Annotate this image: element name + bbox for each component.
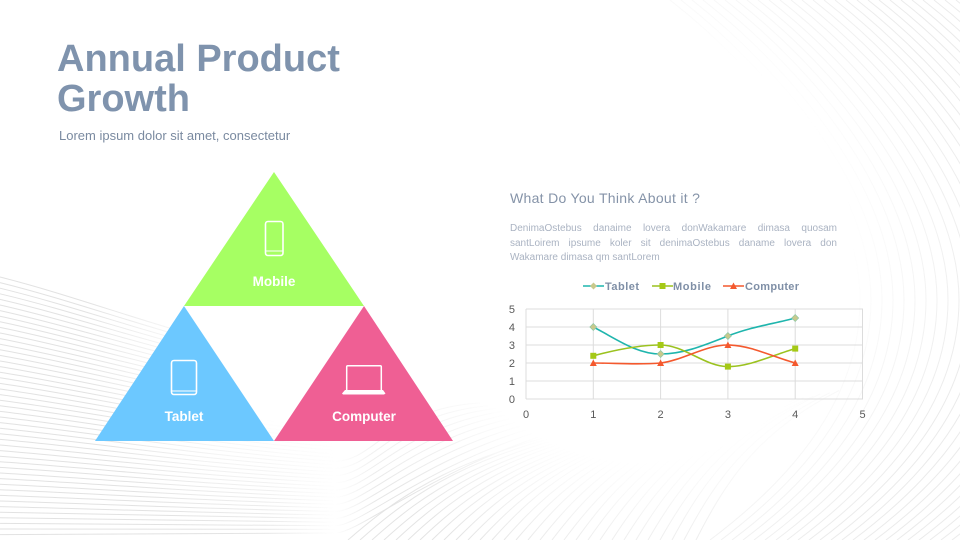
paragraph xyxy=(510,223,837,263)
label: Tablet: Tablet xyxy=(165,409,203,424)
label: Computer: Computer xyxy=(332,409,396,424)
series: Mobile xyxy=(590,342,798,370)
chart axis labels: 3 xyxy=(509,340,515,352)
triangle: Computer xyxy=(274,306,453,441)
chart axis labels: 4 xyxy=(509,322,515,334)
icon: tablet xyxy=(172,360,196,394)
chart legend xyxy=(583,281,800,293)
series: Computer xyxy=(590,342,799,366)
title: Annual Product xyxy=(57,38,340,80)
chart axis labels: 2 xyxy=(509,358,515,370)
triangle: Mobile xyxy=(184,172,364,306)
chart axis labels: 3 xyxy=(725,409,731,421)
chart axis labels: 1 xyxy=(509,376,515,388)
chart legend: Computer xyxy=(745,281,800,293)
title xyxy=(57,38,340,120)
chart axis labels: 4 xyxy=(792,409,798,421)
chart axis labels: 0 xyxy=(523,409,529,421)
chart axis labels: 0 xyxy=(509,394,515,406)
heading: What Do You Think About it: What Do You Think About it ? xyxy=(510,190,700,206)
triangle: Tablet xyxy=(95,306,274,441)
chart axis labels xyxy=(509,304,866,421)
chart legend: Tablet xyxy=(605,281,639,293)
icon: laptop xyxy=(342,366,386,394)
title: Growth xyxy=(57,78,190,120)
chart legend: Mobile xyxy=(673,281,711,293)
paragraph: santLoirem ipsume koler sit denimaOstebus daname lovera don xyxy=(510,238,837,248)
paragraph: Wakamare dimasa qm santLorem xyxy=(510,252,660,263)
series: Tablet xyxy=(590,314,799,358)
subtitle: Lorem ipsum dolor sit amet, consectetur xyxy=(59,128,290,143)
chart axis labels: 2 xyxy=(658,409,664,421)
chart axis labels: 5 xyxy=(509,304,515,316)
icon: mobile phone xyxy=(266,222,283,256)
label: Mobile: Mobile xyxy=(253,274,295,289)
chart axis labels: 5 xyxy=(859,409,866,421)
chart gridlines xyxy=(526,309,863,399)
paragraph: DenimaOstebus danaime lovera donWakamare dimasa quosam xyxy=(510,223,837,234)
line chart xyxy=(509,281,866,421)
chart axis labels: 1 xyxy=(590,409,596,421)
